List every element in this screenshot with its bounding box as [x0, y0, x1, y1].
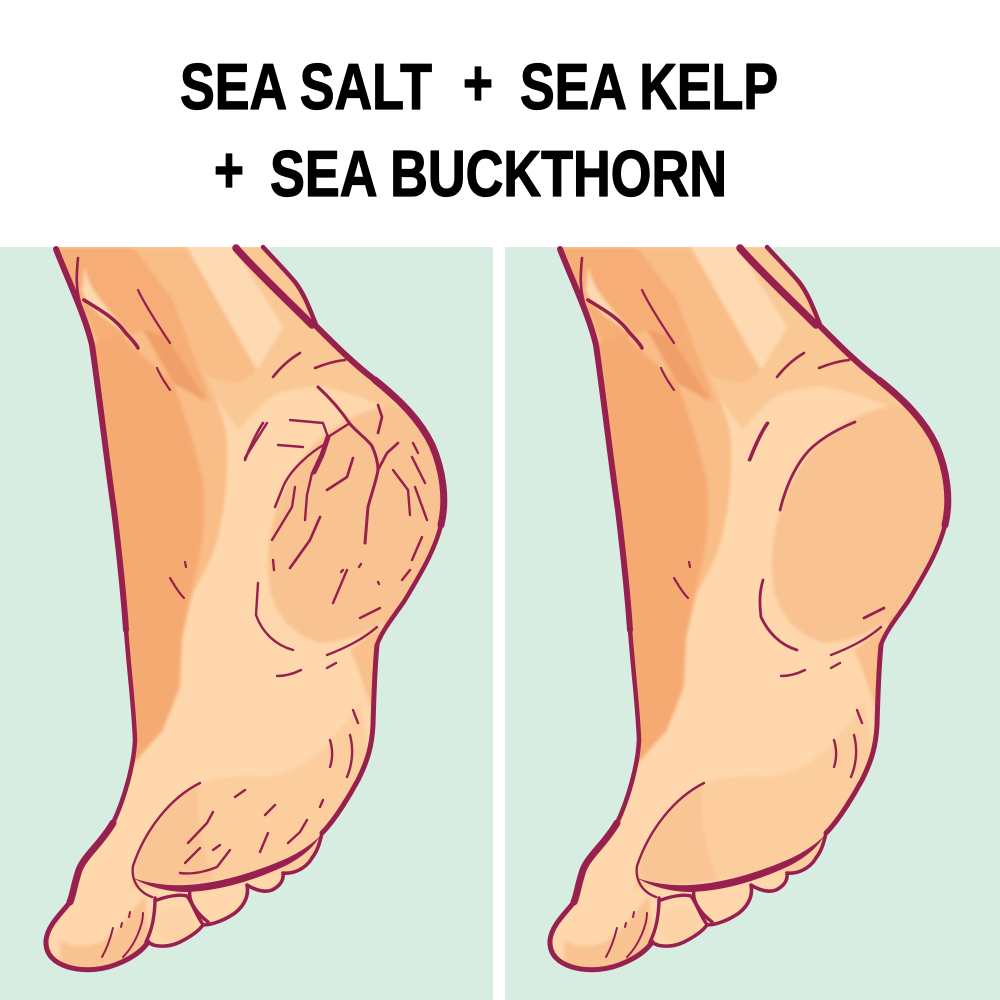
sole pad: [130, 700, 385, 890]
foot outline: [46, 247, 444, 970]
panel: after background: [505, 247, 1000, 1000]
foot base: [30, 240, 460, 980]
foot base copy: [534, 240, 964, 980]
cracks: sole: [180, 790, 323, 873]
cracks: heel: [245, 387, 427, 650]
sole line: [133, 836, 320, 892]
title line 1: +: [463, 46, 493, 119]
title line 1: SEA KELP: [520, 50, 778, 123]
heel pad: [268, 405, 460, 643]
illustration: smooth heel foot (after): [534, 240, 964, 980]
smooth heel marks: [750, 422, 884, 650]
lower creases: [277, 627, 377, 676]
ankle marks: [138, 290, 186, 598]
illustration: cracked heel foot (before): [30, 240, 460, 980]
toes shading: [60, 895, 150, 980]
title line 2: +: [214, 133, 244, 206]
title line 2: SEA BUCKTHORN: [270, 137, 727, 210]
title line 1: [180, 46, 778, 123]
title: [180, 46, 778, 210]
title line 1: SEA SALT: [180, 50, 432, 123]
panel: before background: [0, 247, 493, 1000]
